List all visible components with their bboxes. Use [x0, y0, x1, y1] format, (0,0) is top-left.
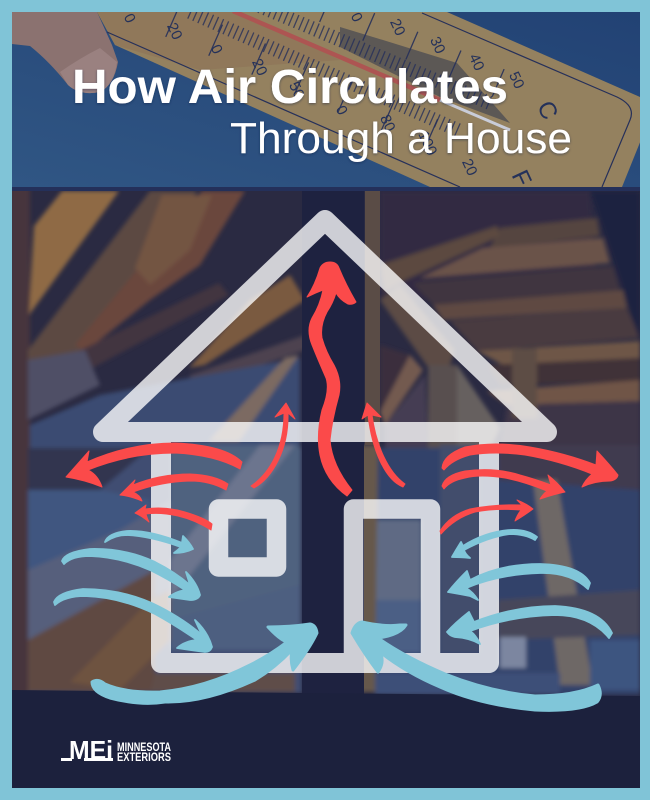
thermometer numbers: 0: [120, 11, 139, 26]
lower left area: [100, 448, 302, 693]
thermometer numbers: C: [531, 97, 563, 124]
thermometer numbers: [120, 10, 563, 191]
red arrows: warm air rising and escaping: [66, 262, 618, 534]
header panel: thermometer photo: [12, 2, 645, 191]
left arrow 2: [62, 549, 200, 600]
title line 1: How Air Circulates: [72, 61, 508, 114]
small left rising arrow: [251, 403, 295, 488]
thermometer scale: [107, 2, 631, 187]
right arrow 3: [447, 606, 612, 644]
logo: Minnesota Exteriors: EXTERIORS: [117, 750, 171, 764]
centre post: [302, 187, 364, 697]
logo mark: MEi: [69, 735, 113, 765]
footer band: [12, 690, 640, 788]
thermometer numbers: 20: [386, 16, 409, 38]
thermometer numbers: 0: [332, 103, 351, 118]
thermometer numbers: F: [506, 166, 537, 191]
photo panel: attic beams: [10, 185, 640, 788]
right upper beams: [380, 191, 597, 300]
left arrow 2: [120, 474, 228, 501]
left arrow 1: [66, 443, 242, 487]
right arrow 2: [448, 564, 590, 600]
small right rising arrow: [362, 403, 405, 487]
logo: Minnesota Exteriors: [61, 735, 171, 765]
title: [72, 61, 572, 163]
thermometer numbers: 80: [376, 112, 399, 134]
left arrow 3: [54, 589, 212, 652]
left arrow 1: [105, 531, 193, 553]
house icon: [103, 220, 547, 663]
walls: [161, 442, 489, 663]
right arrow 1: [442, 444, 618, 487]
thermometer numbers: 40: [465, 51, 488, 73]
title line 2: Through a House: [230, 114, 572, 163]
thermometer numbers: 20: [248, 56, 271, 78]
thermometer numbers: 20: [163, 20, 186, 42]
blue arrows: cool air entering: [54, 530, 612, 710]
door: [354, 509, 430, 653]
thermometer numbers: 50: [505, 69, 528, 91]
lower right area: [375, 448, 640, 695]
thermometer body: [97, 12, 645, 187]
thermometer numbers: 100: [414, 128, 440, 158]
left arrow 3: [135, 505, 212, 530]
thermometer numbers: 30: [426, 34, 449, 56]
logo name: MINNESOTA: [117, 740, 171, 754]
left upper beams: [10, 185, 30, 695]
thermometer numbers: 0: [347, 10, 366, 25]
right arrow 1: [452, 530, 537, 558]
centre wavy arrow: [307, 262, 356, 496]
right arrow 2: [442, 470, 565, 499]
roof: [103, 220, 547, 432]
thermometer numbers: 0: [207, 42, 226, 57]
right arrow 3: [440, 500, 533, 534]
finger: [12, 12, 118, 93]
thermometer numbers: 20: [458, 156, 481, 178]
window: [218, 509, 276, 567]
thermometer numbers: 50: [285, 79, 308, 101]
bottom left arrow: [92, 624, 317, 703]
bottom right arrow: [352, 622, 600, 710]
